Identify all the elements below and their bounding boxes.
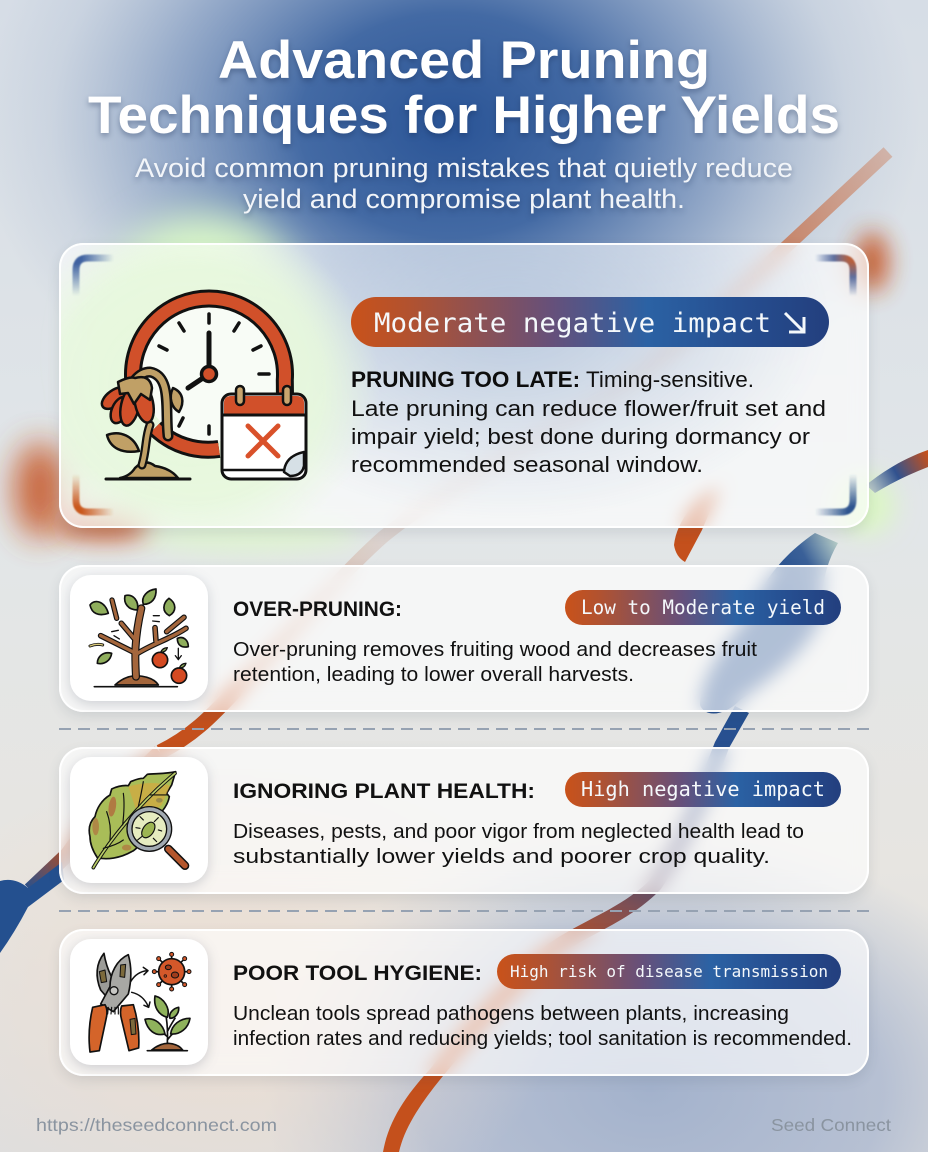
heading: IGNORING PLANT HEALTH: bbox=[233, 779, 535, 803]
description: substantially lower yields and poorer crop quality. bbox=[233, 845, 770, 868]
panel: over-pruning bbox=[59, 565, 869, 712]
title: Advanced Pruning bbox=[218, 31, 710, 90]
panel: pruning too late bbox=[59, 243, 869, 528]
description bbox=[233, 638, 757, 686]
icon: pruners, virus and seedling bbox=[70, 939, 208, 1065]
description: PRUNING TOO LATE: Timing-sensitive. bbox=[351, 367, 754, 392]
yield badge: Low to Moderate yield bbox=[581, 596, 825, 619]
icon: clock, wilted flower and calendar bbox=[98, 298, 306, 479]
title bbox=[86, 31, 840, 218]
title: Techniques for Higher Yields bbox=[88, 86, 840, 145]
description: Late pruning can reduce flower/fruit set and bbox=[351, 396, 826, 421]
description bbox=[233, 1002, 852, 1050]
icon: pruned tree bbox=[70, 575, 208, 701]
description bbox=[233, 820, 804, 868]
description: impair yield; best done during dormancy or bbox=[351, 424, 811, 449]
title: yield and compromise plant health. bbox=[243, 184, 685, 214]
risk badge bbox=[497, 954, 841, 989]
impact badge: Moderate negative impact bbox=[374, 308, 771, 339]
risk badge: High risk of disease transmission bbox=[510, 962, 828, 981]
description bbox=[351, 367, 826, 477]
impact badge bbox=[351, 297, 829, 347]
icon: leaf with magnifier bbox=[70, 757, 208, 883]
description: Over-pruning removes fruiting wood and decreases fruit bbox=[233, 638, 757, 661]
impact badge bbox=[565, 772, 841, 807]
footer: Seed Connect bbox=[771, 1115, 891, 1135]
footer: https://theseedconnect.com bbox=[36, 1115, 277, 1135]
description: Unclean tools spread pathogens between plants, increasing bbox=[233, 1002, 789, 1025]
corner brackets bbox=[76, 258, 853, 512]
description: Diseases, pests, and poor vigor from neglected health lead to bbox=[233, 820, 804, 843]
impact badge: High negative impact bbox=[581, 777, 825, 801]
title: Avoid common pruning mistakes that quietly reduce bbox=[135, 153, 793, 183]
description: infection rates and reducing yields; tool sanitation is recommended. bbox=[233, 1027, 852, 1050]
heading: OVER-PRUNING: bbox=[233, 597, 402, 621]
description: recommended seasonal window. bbox=[351, 452, 703, 477]
yield badge bbox=[565, 590, 841, 625]
panel: ignoring plant health bbox=[59, 747, 869, 894]
description: retention, leading to lower overall harvests. bbox=[233, 663, 634, 686]
heading: POOR TOOL HYGIENE: bbox=[233, 961, 482, 985]
panel: poor tool hygiene bbox=[59, 929, 869, 1076]
